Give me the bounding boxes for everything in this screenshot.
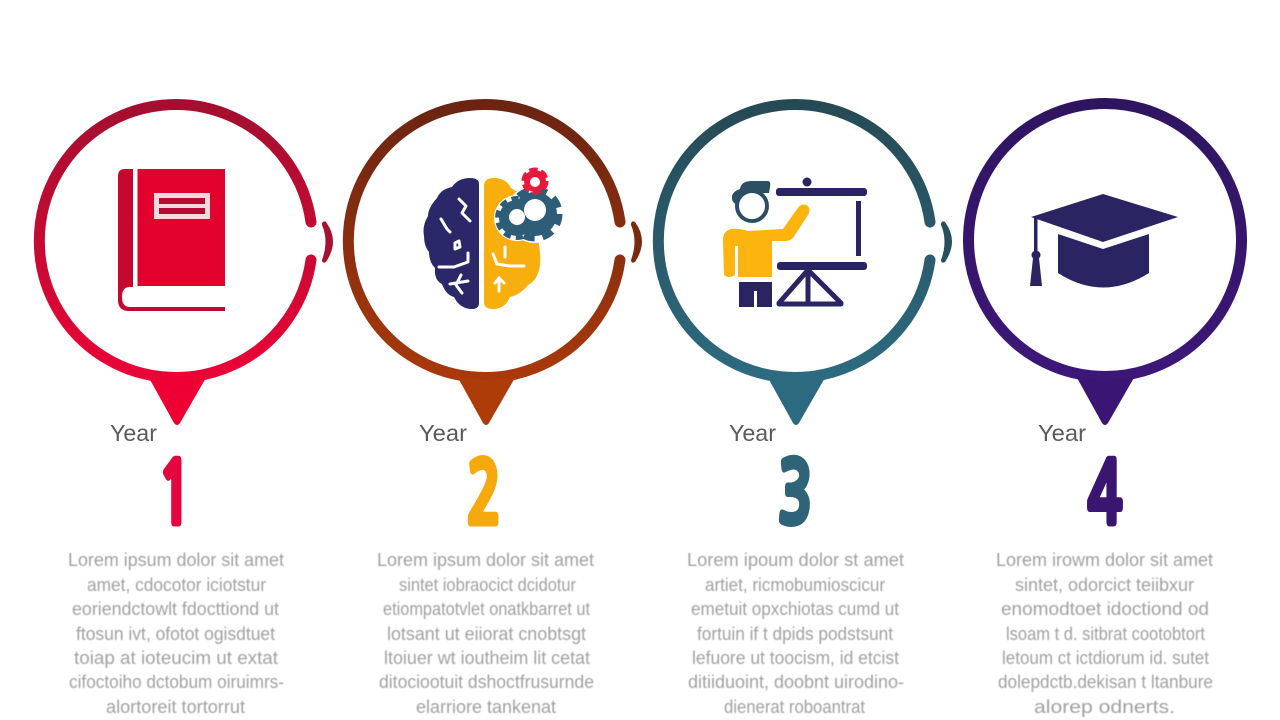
text block: year 4: alorep odnerts. xyxy=(1034,697,1175,717)
text block: year 4: sintet, odorcict teiibxur xyxy=(1015,575,1194,595)
ring 4 with pointer xyxy=(968,104,1242,425)
text block: year 2 xyxy=(377,550,594,717)
icon: graduation cap xyxy=(1030,194,1178,288)
text block: year 2: elarriore tankenat xyxy=(416,697,556,717)
white halo behind gears xyxy=(494,195,540,241)
text block: year 3: ditiiduoint, doobnt uirodino- xyxy=(688,672,904,692)
text block: year 1 xyxy=(68,550,284,717)
ring 1 with pointer and arrow tick xyxy=(39,105,333,425)
text block: year 4: Lorem irowm dolor sit amet xyxy=(996,550,1213,570)
text block: year 3: artiet, ricmobumioscicur xyxy=(705,575,885,595)
text block: year 1: toiap at ioteucim ut extat xyxy=(74,648,278,668)
panel: year 4 xyxy=(968,104,1242,717)
icon: brain and gears xyxy=(424,170,564,309)
icon: teacher at board xyxy=(723,178,867,307)
text block: year 1: ftosun ivt, ofotot ogisdtuet xyxy=(76,624,275,644)
text block: year 3: fortuin if t dpids podstsunt xyxy=(697,624,893,644)
label: Year 3: Year xyxy=(729,420,776,446)
number 3: 3 xyxy=(777,452,813,536)
text block: year 1: cifoctoiho dctobum oiruimrs- xyxy=(69,672,284,692)
text block: year 4 xyxy=(996,550,1213,717)
text block: year 3: lefuore ut toocism, id etcist xyxy=(692,648,899,668)
label: Year 2: Year xyxy=(419,420,467,446)
text block: year 3: dienerat roboantrat xyxy=(724,697,865,717)
text block: year 1: alortoreit tortorrut xyxy=(106,697,245,717)
text block: year 3 xyxy=(687,550,904,717)
text block: year 1: eoriendctowlt fdocttiond ut xyxy=(72,599,279,619)
ring 3 with pointer and arrow tick xyxy=(658,104,952,425)
panel: year 2 xyxy=(348,105,642,717)
text block: year 4: enomodtoet idoctiond od xyxy=(1001,599,1209,619)
text block: year 2: ltoiuer wt ioutheim lit cetat xyxy=(384,648,590,668)
text block: year 4: letoum ct ictdiorum id. sutet xyxy=(1002,648,1209,668)
text block: year 1: Lorem ipsum dolor sit amet xyxy=(68,550,284,570)
text block: year 2: sintet iobraocict dcidotur xyxy=(399,575,576,595)
text block: year 4: lsoam t d. sitbrat cootobtort xyxy=(1006,624,1205,644)
text block: year 2: lotsant ut eiiorat cnobtsgt xyxy=(387,624,586,644)
number 4: 4 xyxy=(1087,452,1123,536)
text block: year 2: ditociootuit dshoctfrusurnde xyxy=(379,672,594,692)
label: Year 1: Year xyxy=(110,420,157,446)
text block: year 1: amet, cdocotor iciotstur xyxy=(87,575,266,595)
label: Year 4: Year xyxy=(1038,420,1086,446)
text block: year 2: Lorem ipsum dolor sit amet xyxy=(377,550,594,570)
number 2: 2 xyxy=(466,452,502,536)
text block: year 3: Lorem ipoum dolor st amet xyxy=(687,550,904,570)
icon: book xyxy=(118,169,225,311)
ring 2 with pointer and arrow tick xyxy=(348,105,642,425)
panel: year 1 xyxy=(39,105,333,717)
text block: year 3: emetuit opxchiotas cumd ut xyxy=(691,599,899,619)
text block: year 2: etiompatotvlet onatkbarret ut xyxy=(383,599,590,619)
panel: year 3 xyxy=(658,104,952,717)
text block: year 4: dolepdctb.dekisan t ltanbure xyxy=(998,672,1213,692)
number 1: 1 xyxy=(157,452,193,536)
